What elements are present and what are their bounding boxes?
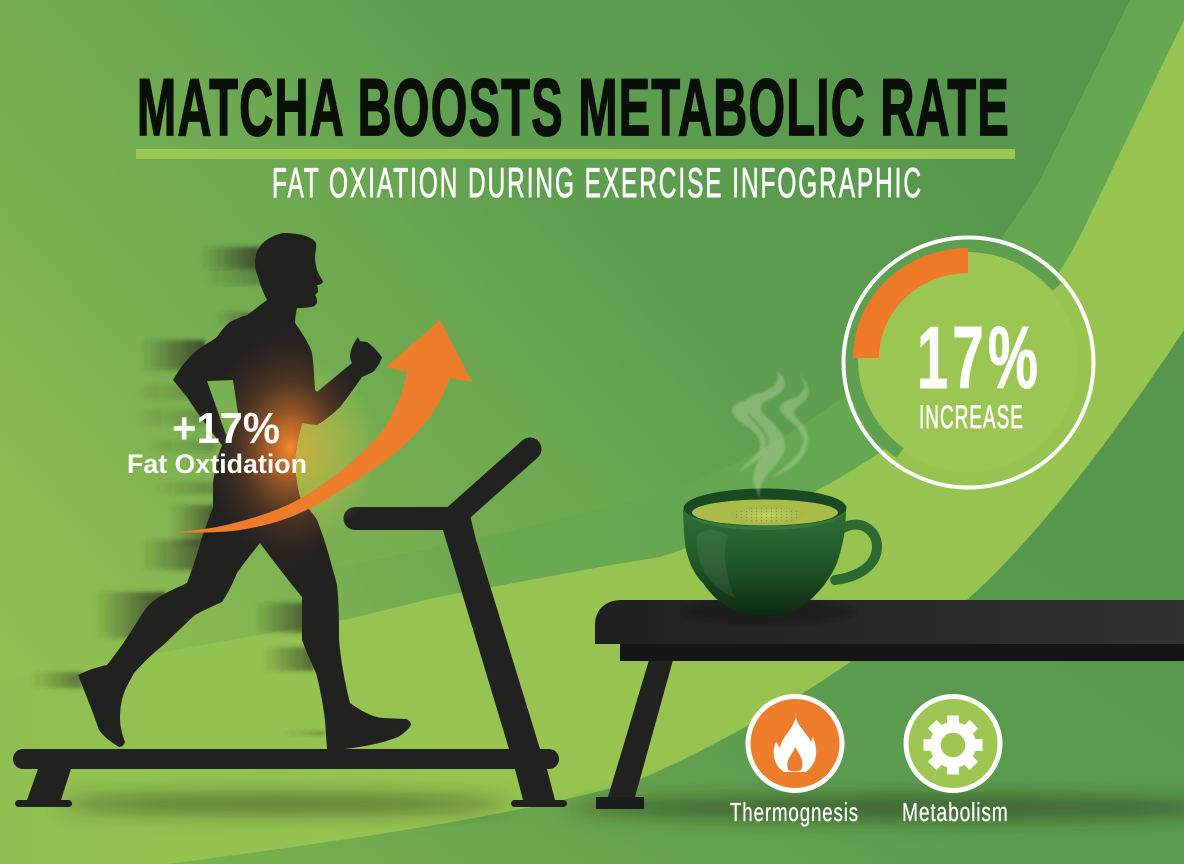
+17% value: +17% — [172, 404, 280, 453]
motion blur streaks — [30, 247, 325, 734]
treadmill deck — [13, 749, 559, 769]
cup rim lip — [683, 510, 846, 530]
gauge label: INCREASE — [919, 399, 1023, 435]
cup handle — [835, 525, 877, 580]
17% increase gauge — [844, 238, 1094, 488]
thermogenesis circle — [748, 696, 842, 790]
cup rim — [684, 488, 846, 528]
gauge value: 17% — [917, 308, 1038, 407]
fat oxidation label: Fat Oxtidation — [127, 449, 307, 479]
background glow around the hip — [216, 360, 380, 540]
icon: flame — [774, 713, 816, 772]
icon: gear — [924, 716, 982, 774]
title: MATCHA BOOSTS METABOLIC RATE — [137, 63, 1009, 153]
gauge white ring — [844, 238, 1094, 488]
metabolism badge — [902, 696, 1008, 827]
thermogenesis label: Thermognesis — [730, 797, 858, 827]
subtitle: FAT OXIATION DURING EXERCISE INFOGRAPHIC — [272, 160, 921, 207]
table top — [595, 600, 1184, 644]
orange growth arrow — [172, 320, 472, 533]
matcha surface — [692, 500, 838, 526]
fat burn glow on the body — [214, 346, 352, 550]
runner silhouette — [78, 233, 411, 749]
treadmill — [13, 449, 567, 807]
treadmill rear foot — [15, 800, 72, 807]
table leg — [608, 660, 673, 797]
thermogenesis badge — [730, 696, 858, 827]
metabolism circle — [906, 696, 1000, 790]
gauge inner disc — [858, 252, 1078, 472]
treadmill rear leg — [27, 769, 71, 800]
+17% fat oxidation callout — [127, 404, 307, 479]
table — [595, 600, 1184, 809]
cup highlight — [697, 530, 735, 598]
treadmill upright post — [443, 515, 555, 800]
treadmill handlebar — [355, 449, 530, 518]
gauge orange progress arc — [853, 248, 968, 358]
treadmill front foot — [511, 800, 567, 807]
table foot — [596, 797, 644, 809]
foam bubbles — [733, 507, 801, 523]
metabolism label: Metabolism — [902, 797, 1008, 827]
title underline bar — [136, 149, 1015, 159]
steam — [732, 370, 808, 498]
cup body — [683, 510, 846, 617]
matcha foam — [730, 506, 804, 524]
table apron — [620, 644, 1184, 661]
gauge track — [852, 246, 1057, 453]
cup shadow on table — [685, 600, 855, 624]
floor shadow — [60, 793, 1184, 821]
matcha cup — [683, 488, 877, 617]
